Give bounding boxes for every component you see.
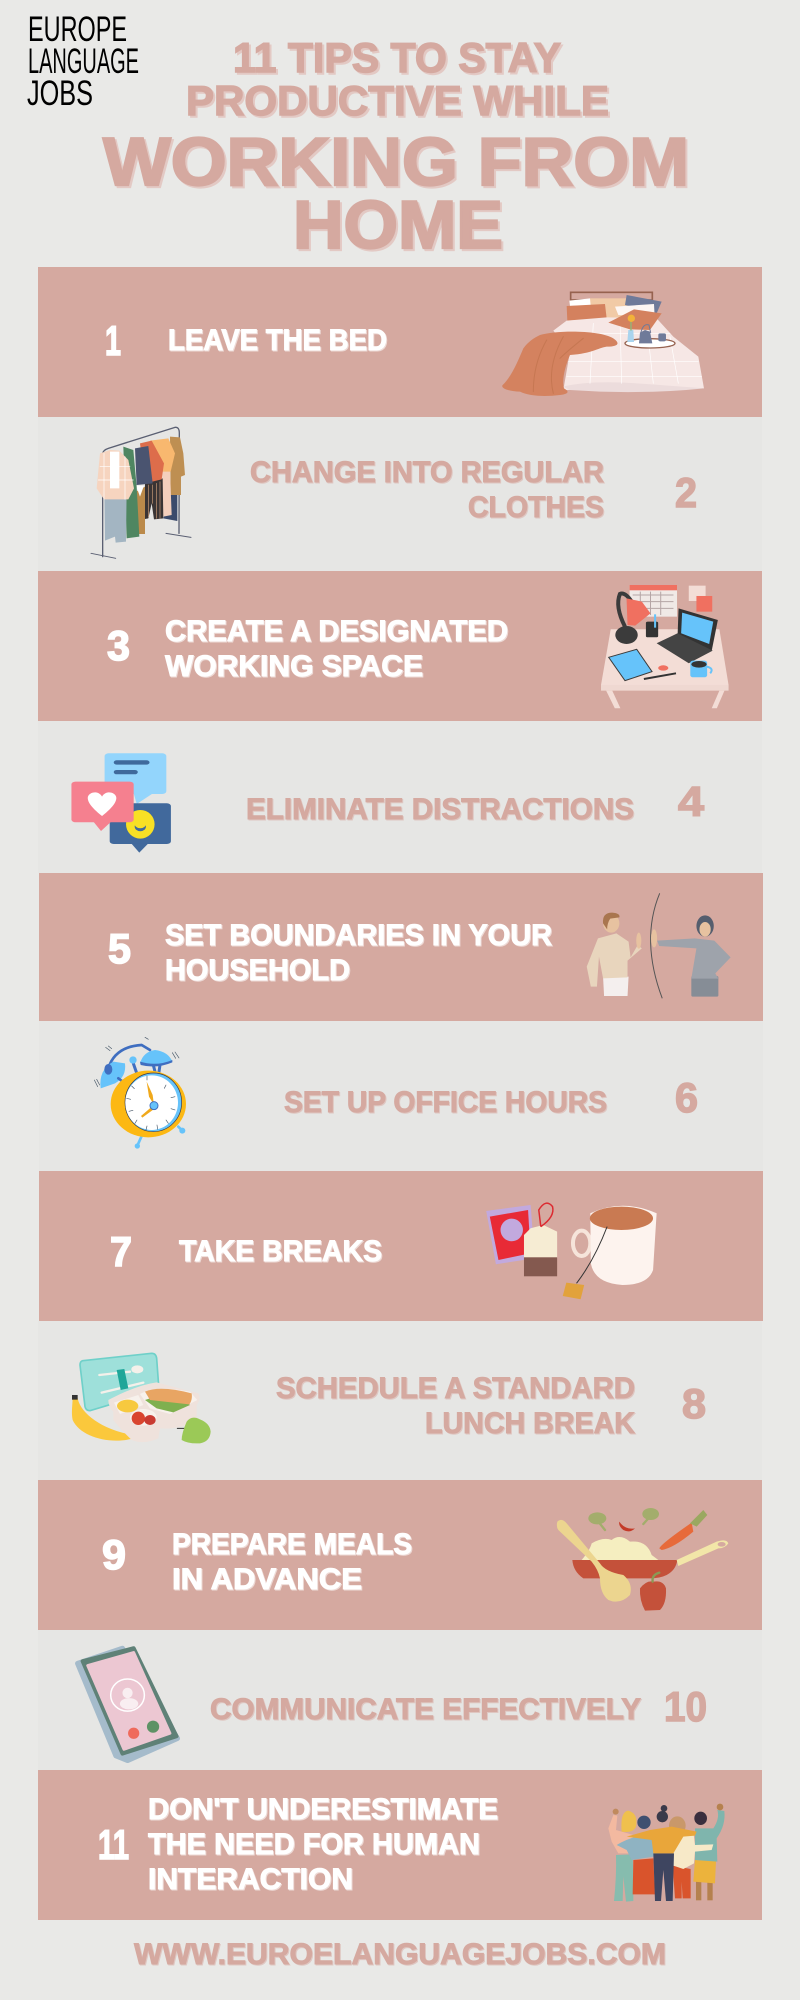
panel: tip 1 leave the bed: 1 [105, 317, 121, 364]
panel: tip 10 communicate effectively: 10 [664, 1683, 707, 1730]
panel: tip 8 schedule a standard lunch break: SCHEDULE A STANDARD [276, 1372, 635, 1405]
footer website url: WWW.EUROELANGUAGEJOBS.COM [134, 1938, 666, 1971]
panel: tip 6 set up office hours: 6 [675, 1074, 698, 1121]
panel: tip 8 schedule a standard lunch break: 8 [682, 1380, 706, 1427]
panel: tip 5 set boundaries in your household [39, 873, 763, 1021]
panel: tip 4 eliminate distractions [38, 721, 762, 873]
panel: tip 3 create a designated working space: CREATE A DESIGNATED [165, 615, 508, 648]
icon: clothes rack [91, 427, 191, 558]
icon: two people with boundary wall [587, 893, 731, 998]
panel: tip 6 set up office hours [39, 1021, 763, 1171]
icon: lunchbox with banana and pear [72, 1353, 211, 1443]
title: HOME [293, 187, 503, 263]
panel: tip 11 don't underestimate the need for human interaction: INTERACTION [148, 1863, 353, 1896]
panel: tip 9 prepare meals in advance: 9 [102, 1531, 126, 1578]
logo: Europe Language Jobs: LANGUAGE [28, 42, 139, 81]
title: WORKING FROM [103, 124, 689, 200]
panel: tip 3 create a designated working space [38, 571, 762, 721]
icon: bed with tray [502, 292, 704, 396]
panel: tip 7 take breaks [39, 1171, 763, 1321]
panel: tip 11 don't underestimate the need for human interaction: DON'T UNDERESTIMATE [148, 1793, 498, 1826]
panel: tip 3 create a designated working space: 3 [107, 622, 130, 669]
panel: tip 11 don't underestimate the need for human interaction: 11 [98, 1821, 129, 1868]
title [103, 34, 689, 263]
panel: tip 7 take breaks: TAKE BREAKS [179, 1235, 382, 1268]
panel: tip 2 change into regular clothes: 2 [675, 469, 697, 516]
icon: desk with laptop [601, 585, 729, 708]
panel: tip 5 set boundaries in your household: HOUSEHOLD [165, 954, 350, 987]
panel: tip 10 communicate effectively [38, 1630, 762, 1770]
panel: tip 1 leave the bed: LEAVE THE BED [168, 324, 387, 357]
panel: tip 5 set boundaries in your household: 5 [108, 925, 131, 972]
panel: tip 2 change into regular clothes: CLOTHES [468, 491, 604, 524]
panel: tip 9 prepare meals in advance: IN ADVANCE [172, 1563, 362, 1596]
panel: tip 11 don't underestimate the need for human interaction [38, 1770, 762, 1920]
panel: tip 2 change into regular clothes: CHANGE INTO REGULAR [250, 456, 604, 489]
panel: tip 10 communicate effectively: COMMUNICATE EFFECTIVELY [210, 1693, 641, 1726]
panel: tip 9 prepare meals in advance [38, 1480, 762, 1630]
panel: tip 2 change into regular clothes [38, 417, 762, 571]
panel: tip 8 schedule a standard lunch break [38, 1321, 762, 1480]
icon: chat bubbles [71, 753, 171, 853]
icon: group of friends hugging [608, 1804, 725, 1902]
icon: smartphone incoming call [78, 1648, 178, 1761]
logo: Europe Language Jobs: EUROPE [28, 10, 127, 49]
title: 11 TIPS TO STAY [233, 34, 561, 81]
panel: tip 4 eliminate distractions: ELIMINATE DISTRACTIONS [246, 793, 634, 826]
panel: tip 7 take breaks: 7 [110, 1228, 132, 1275]
title: PRODUCTIVE WHILE [186, 77, 609, 124]
logo: Europe Language Jobs: JOBS [27, 74, 93, 113]
panel: tip 11 don't underestimate the need for human interaction: THE NEED FOR HUMAN [148, 1828, 480, 1861]
panel: tip 5 set boundaries in your household: SET BOUNDARIES IN YOUR [165, 919, 552, 952]
logo: Europe Language Jobs [27, 10, 139, 113]
icon: alarm clock [94, 1037, 186, 1149]
panel: tip 4 eliminate distractions: 4 [678, 778, 705, 825]
icon: tea bag and mug [486, 1203, 657, 1299]
panel: tip 9 prepare meals in advance: PREPARE MEALS [172, 1528, 412, 1561]
panel: tip 3 create a designated working space: WORKING SPACE [165, 650, 423, 683]
icon: pan with vegetables [557, 1508, 728, 1611]
panel: tip 6 set up office hours: SET UP OFFICE HOURS [284, 1086, 607, 1119]
panel: tip 1 leave the bed [38, 267, 762, 417]
panel: tip 8 schedule a standard lunch break: LUNCH BREAK [425, 1407, 635, 1440]
